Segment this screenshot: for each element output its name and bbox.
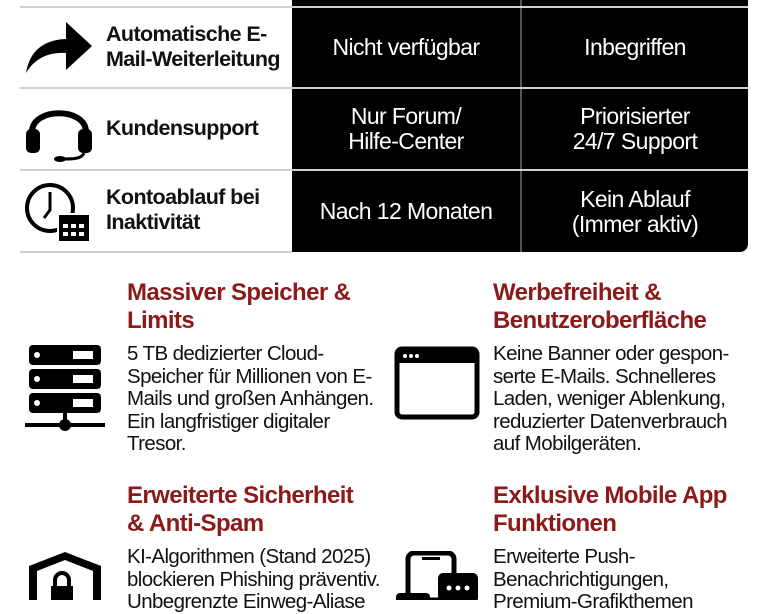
cell: support free	[348, 103, 464, 154]
cell: expiry paid: (Immer aktiv)	[572, 210, 698, 236]
text: Laden, weniger Ablenkung,	[493, 387, 725, 410]
label: forwarding: Mail-Weiterleitung	[106, 47, 280, 71]
text: blockieren Phishing präventiv.	[127, 568, 380, 590]
heading: Funktionen	[493, 510, 616, 537]
cell: expiry free: Nach 12 Monaten	[320, 198, 492, 224]
icon: browser window	[394, 346, 480, 420]
text	[127, 342, 374, 455]
cell: support paid: Priorisierter	[580, 103, 690, 129]
text: Tresor.	[127, 432, 186, 455]
heading: Limits	[127, 307, 194, 334]
text: Ein langfristiger digitaler	[127, 410, 330, 432]
cell: expiry paid	[572, 186, 698, 237]
label: expiry: Kontoablauf bei	[106, 185, 259, 209]
panel: security	[29, 482, 380, 613]
text: serte E-Mails. Schnelleres	[493, 364, 716, 388]
cell: support paid: 24/7 Support	[573, 128, 697, 154]
icon: headset	[26, 110, 92, 162]
label: support: Kundensupport	[106, 116, 258, 140]
text: 5 TB dedizierter Cloud-	[127, 342, 324, 365]
label: forwarding	[106, 22, 280, 71]
label: expiry	[106, 185, 259, 234]
icon: server	[25, 345, 105, 431]
text: auf Mobilgeräten.	[493, 432, 641, 455]
text	[493, 342, 729, 455]
heading: Massiver Speicher &	[127, 279, 350, 306]
cell: forwarding paid: Inbegriffen	[584, 34, 686, 60]
text	[127, 545, 380, 613]
text: Speicher für Millionen von E-	[127, 364, 372, 388]
heading: Werbefreiheit &	[493, 279, 661, 306]
heading	[127, 279, 350, 334]
heading: & Anti-Spam	[127, 510, 264, 537]
heading: Exklusive Mobile App	[493, 482, 727, 509]
panel: storage	[25, 279, 374, 455]
text: Premium-Grafikthemen	[493, 590, 693, 613]
label: forwarding: Automatische E-	[106, 22, 267, 46]
icon: phone chat	[396, 551, 478, 600]
heading: Benutzeroberfläche	[493, 307, 706, 334]
text: Benachrichtigungen,	[493, 568, 669, 590]
panel: ad-free	[394, 279, 729, 455]
text: Erweiterte Push-	[493, 545, 635, 568]
cell: expiry paid: Kein Ablauf	[580, 186, 690, 212]
text: KI-Algorithmen (Stand 2025)	[127, 545, 371, 568]
icon: clock calendar	[25, 183, 89, 241]
panel: mobile app	[396, 482, 727, 613]
heading	[127, 482, 354, 537]
cell: support paid	[573, 103, 698, 154]
cell: forwarding free: Nicht verfügbar	[333, 34, 479, 60]
text: Keine Banner oder gespon-	[493, 342, 729, 365]
text: Mails und großen Anhängen.	[127, 387, 374, 410]
cell: support free: Nur Forum/	[351, 103, 461, 129]
label: expiry: Inaktivität	[106, 210, 200, 234]
heading	[493, 279, 706, 334]
heading: Erweiterte Sicherheit	[127, 482, 353, 509]
icon: forward arrow	[26, 22, 92, 73]
text: reduzierter Datenverbrauch	[493, 410, 727, 432]
text: Unbegrenzte Einweg-Aliase	[127, 590, 365, 613]
icon: shield	[29, 552, 101, 600]
heading	[493, 482, 727, 537]
cell: support free: Hilfe-Center	[348, 128, 464, 154]
table: comparison	[20, 0, 748, 253]
text	[493, 545, 693, 613]
